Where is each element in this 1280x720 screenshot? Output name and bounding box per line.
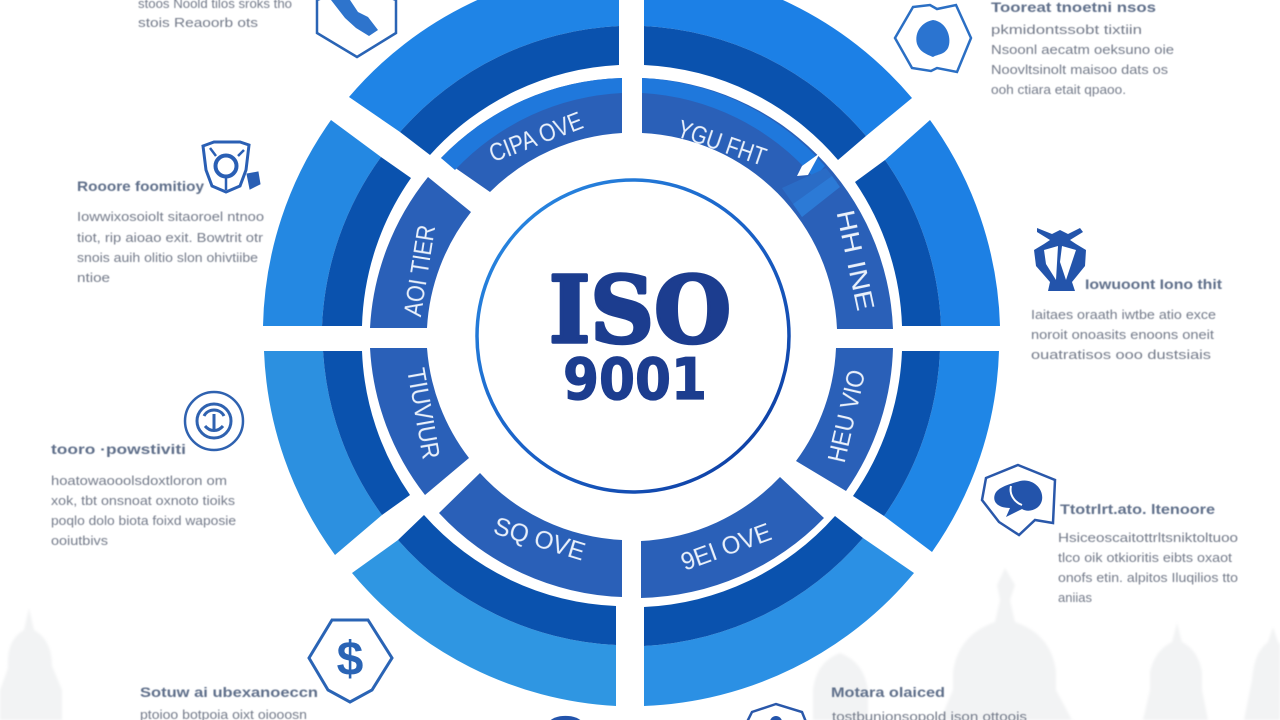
icon: top right hexagon: [895, 5, 971, 72]
text block: top right: ooh ctiara etait qpaoo.: [991, 83, 1126, 97]
icon: bottom center: [549, 716, 582, 720]
text block: right: noroit onoasits enoons oneit: [1031, 328, 1215, 342]
icon: top left hexagon: [317, 0, 396, 57]
inner segment: left upper: AOI TIER: [399, 223, 441, 318]
segment: left upper: [263, 120, 411, 326]
text block: left: [51, 441, 236, 548]
inner segment: right lower: [796, 348, 893, 491]
text block: bottom right: [831, 684, 1027, 720]
icon: left ring: [185, 392, 243, 450]
text block: upper left: Rooore foomitioy: [77, 178, 204, 194]
text block: left: hoatowaooolsdoxtloron om: [51, 474, 227, 488]
text block: right lower: tlco oik otkioritis eibts oxaot: [1058, 551, 1233, 565]
segment: bottom left: [352, 515, 616, 706]
title: 9001: 9001: [563, 347, 707, 413]
text block: upper left: tiot, rip aioao exit. Bowtrit otr: [77, 231, 263, 245]
text block: right: [1031, 276, 1222, 362]
text block: top left: [138, 0, 292, 30]
text block: top right: Noovltsinolt maisoo dats os: [991, 63, 1168, 77]
inner segment: top right and right upper: HH INE: [831, 208, 879, 313]
text block: right lower: [1058, 501, 1238, 605]
inner segment: bottom left: SQ OVE: [490, 512, 588, 566]
text block: right lower: Hsiceoscaitottrltsniktoltuoo: [1058, 531, 1238, 545]
segment: left lower: [264, 351, 410, 555]
text block: top right: pkmidontssobt tixtiin: [991, 23, 1142, 37]
text block: right: Iaitaes oraath iwtbe atio exce: [1031, 308, 1216, 322]
inner segment: top left: CIPA OVE: [485, 107, 587, 168]
text block: upper left: ntioe: [77, 271, 110, 285]
icon: dollar hexagon: [309, 620, 392, 702]
inner segment: top right and right upper: [642, 78, 893, 329]
background: skyline silhouettes: [0, 568, 1280, 720]
ring: inner segments: [370, 78, 893, 598]
icon: dollar hexagon: $: [337, 633, 364, 686]
segment: bottom right: [644, 516, 914, 706]
segment: right upper: [855, 120, 1000, 326]
title: ISO: ISO: [549, 256, 731, 364]
inner segment: right lower: HEU VIO: [823, 367, 871, 465]
text block: right lower: Ttotrlrt.ato. ltenoore: [1060, 501, 1215, 517]
icon: right lower speech bubbles: [982, 465, 1055, 535]
text block: top right: Nsoonl aecatm oeksuno oie: [991, 43, 1174, 57]
text block: bottom right: Motara olaiced: [831, 684, 945, 700]
text block: upper left: Iowwixosoiolt sitaoroel ntnoo: [77, 210, 264, 224]
inner segment: top right and right upper: YGU FHT: [674, 115, 770, 172]
text block: bottom left: [140, 684, 318, 720]
text block: right: ouatratisos ooo dustsiais: [1031, 348, 1211, 362]
text block: left: tooro ·powstiviti: [51, 441, 186, 457]
ring: outer segments: [263, 0, 1000, 706]
text block: left: poqlo dolo biota foixd waposie: [51, 514, 236, 528]
icon: upper left ring: [203, 142, 260, 192]
text block: upper left: [77, 178, 264, 285]
text block: bottom left: Sotuw ai ubexanoeccn: [140, 684, 318, 700]
text block: top left: stois Reaoorb ots: [138, 16, 258, 30]
center circle: [477, 180, 789, 492]
text block: left: ooiutbivs: [51, 534, 108, 548]
segment: top left: [349, 0, 619, 155]
inner segment: left upper: [370, 177, 471, 328]
text block: right lower: aniias: [1058, 591, 1092, 605]
inner segment: bottom left: [439, 473, 622, 597]
inner segment: top left: [441, 78, 622, 192]
text block: right: Iowuoont Iono thit: [1085, 276, 1222, 292]
inner segment: left lower: [370, 348, 469, 495]
text block: upper left: snois auih olitio slon ohivtiibe: [77, 251, 258, 265]
icon: bottom right: [747, 704, 806, 720]
icon: right crown shield: [1034, 228, 1086, 291]
text block: top right: [991, 0, 1174, 97]
text block: right lower: onofs etin. alpitos Iluqilios tto: [1058, 571, 1238, 585]
text block: left: xok, tbt onsnoat oxnoto tioiks: [51, 494, 235, 508]
segment: right lower: [853, 351, 999, 552]
inner segment: left lower: TIUVIUR: [401, 366, 445, 461]
inner segment: bottom right: [641, 477, 824, 598]
segment: top right: [644, 0, 912, 160]
inner segment: bottom right: 9EI OVE: [677, 518, 775, 577]
